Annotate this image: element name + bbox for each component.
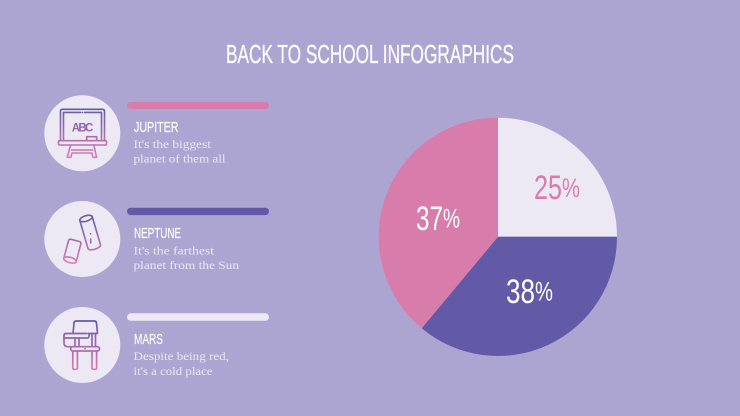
label: 38%: % (535, 276, 553, 306)
bar: light (127, 313, 269, 321)
icon: school desk (44, 307, 120, 383)
pie chart (379, 118, 617, 356)
slice: 37% (379, 118, 498, 328)
heading: neptune: NEPTUNE (134, 226, 181, 242)
bar: purple (127, 208, 269, 215)
slice: 38% (422, 237, 617, 356)
heading: jupiter: JUPITER (134, 120, 178, 136)
description: jupiter: It's the biggest (134, 139, 212, 151)
panel: mars (44, 307, 269, 383)
description: jupiter: planet of them all (134, 154, 226, 166)
label: 25%: % (562, 173, 580, 203)
label: 25%: 25 (534, 169, 562, 207)
panel: neptune (44, 201, 269, 277)
label: 37%: % (443, 204, 460, 234)
panel: jupiter (44, 95, 269, 171)
icon: chalkboard: ABC (72, 123, 93, 135)
icon: chalkboard (44, 95, 120, 171)
icon: chalk sticks (44, 201, 120, 277)
label: 38%: 38 (506, 273, 535, 311)
title: BACK TO SCHOOL INFOGRAPHICS (226, 39, 514, 69)
bar: pink (127, 102, 269, 109)
description: neptune: It's the farthest (134, 245, 215, 257)
label: 37%: 37 (416, 200, 443, 238)
slice: 25% (498, 118, 617, 237)
heading: mars: MARS (134, 332, 163, 348)
description: neptune: planet from the Sun (134, 260, 239, 272)
description: mars: it's a cold place (134, 366, 212, 378)
description: mars: Despite being red, (134, 351, 229, 363)
